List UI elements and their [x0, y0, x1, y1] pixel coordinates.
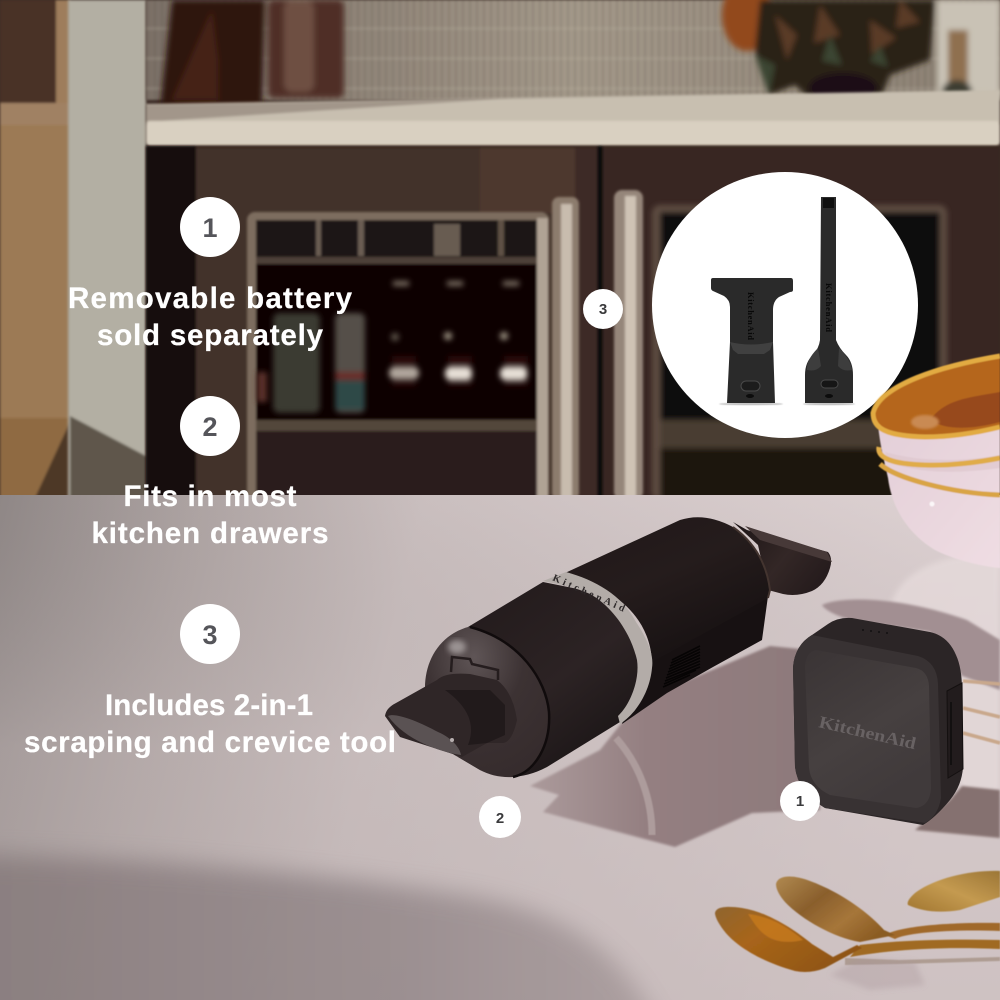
- icon: crevice tool: KitchenAid: [824, 283, 834, 332]
- icon: gold spoons: [715, 871, 1000, 990]
- marker 2 on vacuum: [479, 796, 521, 838]
- badge 2: 2: [202, 412, 218, 442]
- vacuum dome and nozzle: [425, 627, 548, 777]
- feature 1: [68, 197, 353, 352]
- feature 1 text: Removable battery: [68, 282, 353, 315]
- right fridge window: [652, 205, 947, 500]
- countertop shadows: [0, 855, 660, 1000]
- white wall column: [68, 0, 146, 500]
- feature 2 text: kitchen drawers: [92, 517, 328, 550]
- wine bottles: [257, 281, 528, 413]
- countertop: [0, 495, 1000, 1000]
- marker 2 on vacuum: 2: [496, 810, 504, 827]
- panel: tools inset circle: [652, 172, 918, 438]
- marker 3 on tools: [583, 289, 623, 329]
- feature 3 text: Includes 2-in-1: [105, 689, 313, 722]
- feature 2 text: [92, 480, 328, 550]
- vacuum lower base: [622, 596, 768, 724]
- top bowl: [874, 357, 1000, 436]
- feature 2 text: Fits in most: [124, 480, 297, 513]
- feature 3 text: scraping and crevice tool: [24, 726, 396, 759]
- badge 3: 3: [202, 620, 218, 650]
- badge 1: [180, 197, 240, 257]
- background: kitchen wall, wood panel and shelf: [0, 0, 1000, 500]
- icon: hand vacuum: [385, 517, 832, 777]
- icon: battery pack: [793, 618, 963, 825]
- icon: crevice tool: [803, 197, 855, 405]
- battery brand text: KitchenAid: [817, 712, 918, 753]
- bowl rims: [880, 464, 1000, 495]
- door handles: [552, 190, 643, 500]
- icon: scraping tool: KitchenAid: [746, 292, 756, 340]
- badge 3: [180, 604, 240, 664]
- badge 2: [180, 396, 240, 456]
- countertop light ring: [616, 738, 652, 835]
- cabinet with wine fridge doors: [146, 146, 1000, 502]
- vacuum rear body: [565, 517, 770, 662]
- backsplash with decor: [146, 0, 1000, 108]
- bowls: [873, 356, 1000, 568]
- silver ring: [543, 572, 652, 724]
- vacuum front body: [458, 582, 640, 777]
- marker 1 on battery: [780, 781, 820, 821]
- marker 1 on battery: 1: [796, 793, 804, 810]
- vacuum handle: [733, 522, 831, 595]
- wood cabinet panel: [0, 0, 70, 500]
- shelf: [146, 90, 1000, 146]
- icon: scraping tool: [711, 278, 793, 405]
- marker 3 on tools: 3: [599, 301, 607, 318]
- bowl reflection: [890, 554, 1000, 800]
- vacuum vents: [663, 646, 700, 687]
- badge 1: 1: [202, 213, 218, 243]
- vacuum brand text: KitchenAid: [551, 573, 627, 615]
- feature 1 text: sold separately: [97, 319, 324, 352]
- left fridge window: [247, 212, 549, 502]
- feature 3 text: [24, 689, 396, 759]
- bowl bodies: [878, 425, 1000, 568]
- feature 3: [24, 604, 396, 759]
- feature 2: [92, 396, 328, 550]
- feature 1 text: [68, 282, 353, 352]
